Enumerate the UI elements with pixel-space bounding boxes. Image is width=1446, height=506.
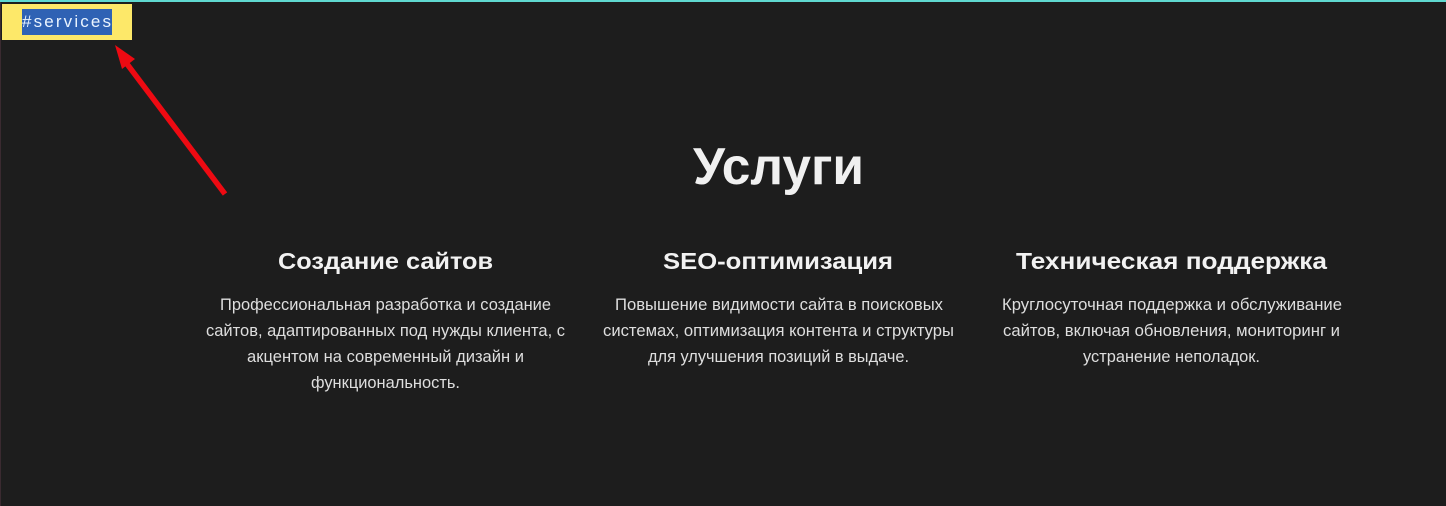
heading: website creation: Создание сайтов — [278, 248, 493, 274]
description: technical support: устранение неполадок. — [1083, 347, 1260, 366]
service column: technical support — [1002, 248, 1342, 366]
anchor label: #services: #services — [22, 12, 111, 31]
anchor label: #services — [2, 4, 132, 40]
arrow pointing to anchor label — [115, 45, 225, 194]
description: website creation — [206, 295, 565, 392]
description: website creation: функциональность. — [311, 373, 460, 392]
description: technical support: сайтов, включая обновления, мониторинг и — [1003, 321, 1340, 340]
description: SEO: системах, оптимизация контента и структуры — [603, 321, 954, 340]
heading: technical support: Техническая поддержка — [1016, 248, 1327, 274]
description: technical support: Круглосуточная поддержка и обслуживание — [1002, 295, 1342, 314]
heading: SEO: SEO-оптимизация — [663, 248, 893, 274]
service column: website creation — [206, 248, 565, 392]
description: SEO: Повышение видимости сайта в поисковых — [615, 295, 943, 314]
description: website creation: Профессиональная разработка и создание — [220, 295, 551, 314]
description: website creation: акцентом на современный дизайн и — [247, 347, 524, 366]
title: Услуги — [693, 138, 864, 196]
description: SEO: для улучшения позиций в выдаче. — [648, 347, 909, 366]
description: SEO — [603, 295, 954, 366]
description: website creation: сайтов, адаптированных под нужды клиента, с — [206, 321, 565, 340]
service column: SEO — [603, 248, 954, 366]
description: technical support — [1002, 295, 1342, 366]
